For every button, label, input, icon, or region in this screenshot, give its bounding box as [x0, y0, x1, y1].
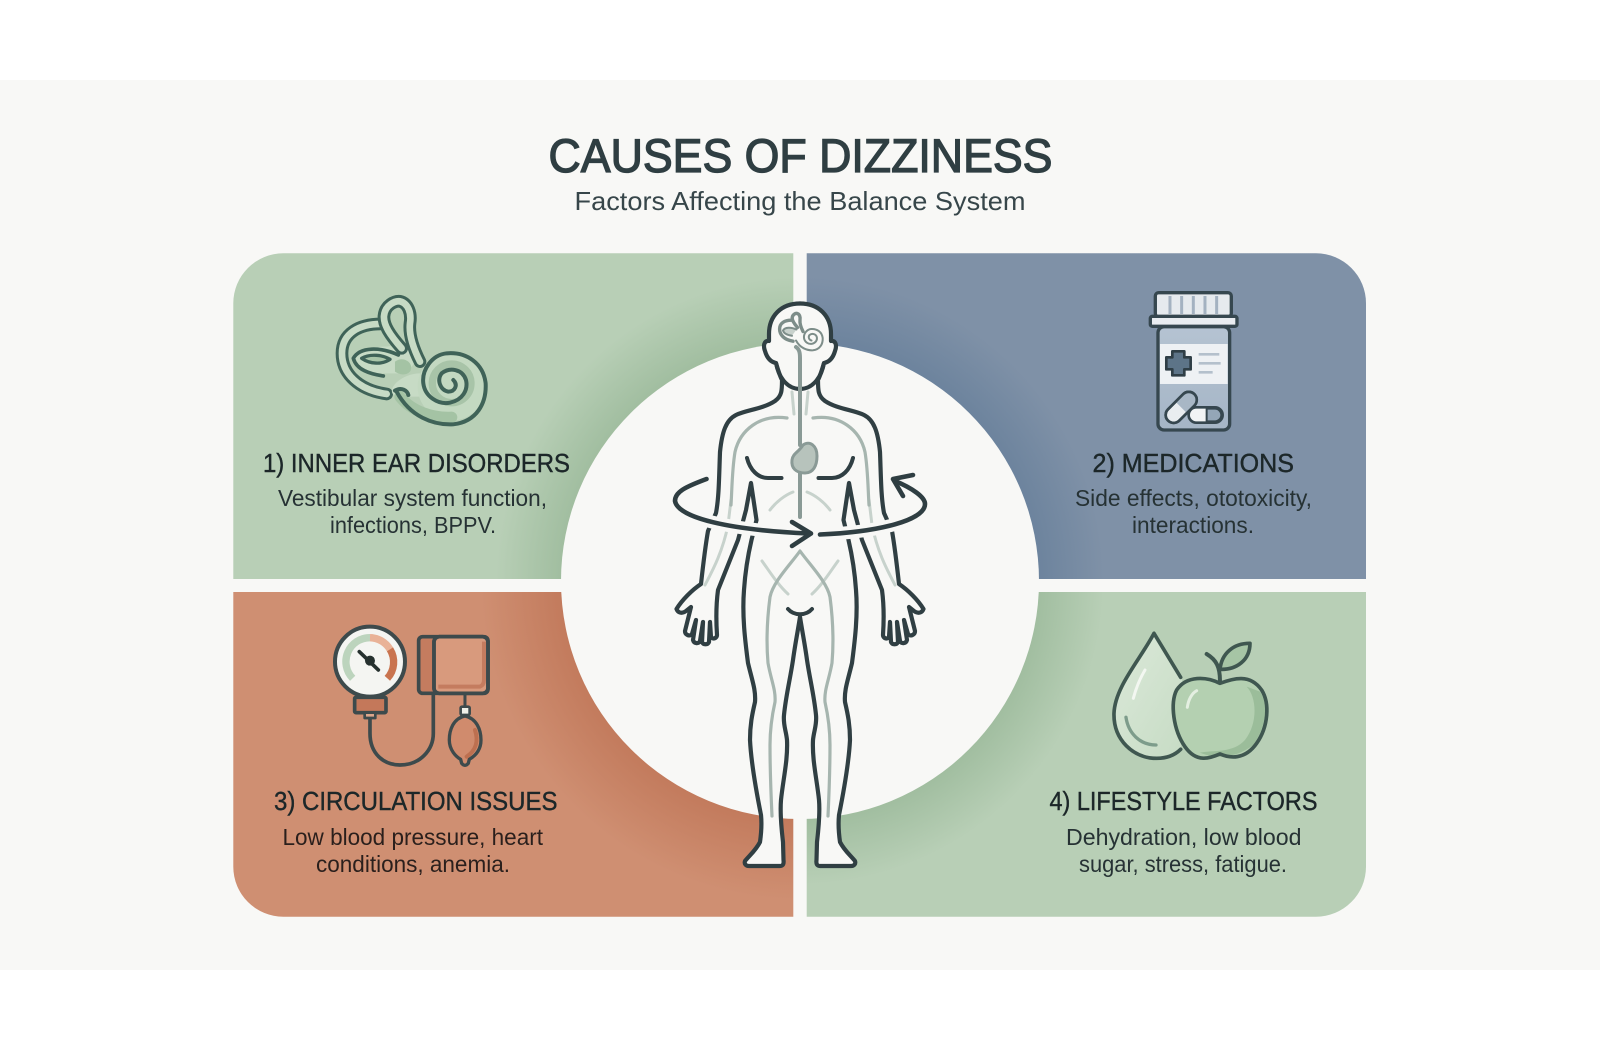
icon: inner ear [342, 301, 486, 424]
spinal cord [796, 347, 800, 517]
mini inner ear in head [780, 313, 823, 350]
chin, chest and groin detail lines [747, 363, 853, 614]
text: medications description line 2: interactions. [1132, 512, 1254, 538]
panel: circulation background [233, 592, 793, 917]
panel: inner ear background [233, 253, 793, 579]
body outline right [800, 304, 924, 866]
panel: medications background [807, 253, 1366, 579]
heart [792, 443, 817, 473]
text: inner ear description line 2: infections, BPPV. [330, 512, 496, 538]
human body figure [675, 304, 925, 866]
title: CAUSES OF DIZZINESS [548, 129, 1052, 182]
subtitle: Factors Affecting the Balance System [574, 186, 1026, 216]
heading: inner ear disorders: 1) INNER EAR DISORDERS [263, 450, 570, 478]
icon: blood pressure monitor [335, 627, 488, 765]
heading: circulation issues: 3) CIRCULATION ISSUES [274, 788, 558, 816]
icon: pill bottle [1150, 293, 1237, 430]
panel: lifestyle background [807, 592, 1366, 917]
body outline left [676, 304, 800, 866]
gray nerve lines [731, 417, 869, 816]
icon: water drop and apple [1114, 633, 1267, 758]
heading: lifestyle factors: 4) LIFESTYLE FACTORS [1050, 788, 1318, 816]
text: circulation description line 1: Low blood pressure, heart [282, 824, 544, 850]
text: lifestyle description line 1: Dehydration, low blood [1066, 824, 1302, 850]
light nerve lines [705, 392, 895, 594]
rotation arrow halo [675, 479, 925, 534]
heading: medications: 2) MEDICATIONS [1092, 450, 1294, 478]
text: medications description line 1: Side effects, ototoxicity, [1075, 485, 1312, 511]
rotation arrow [675, 475, 925, 546]
center circle [561, 343, 1039, 819]
text: lifestyle description line 2: sugar, stress, fatigue. [1079, 851, 1287, 877]
text: inner ear description line 1: Vestibular system function, [278, 485, 547, 511]
text: circulation description line 2: conditions, anemia. [316, 851, 510, 877]
